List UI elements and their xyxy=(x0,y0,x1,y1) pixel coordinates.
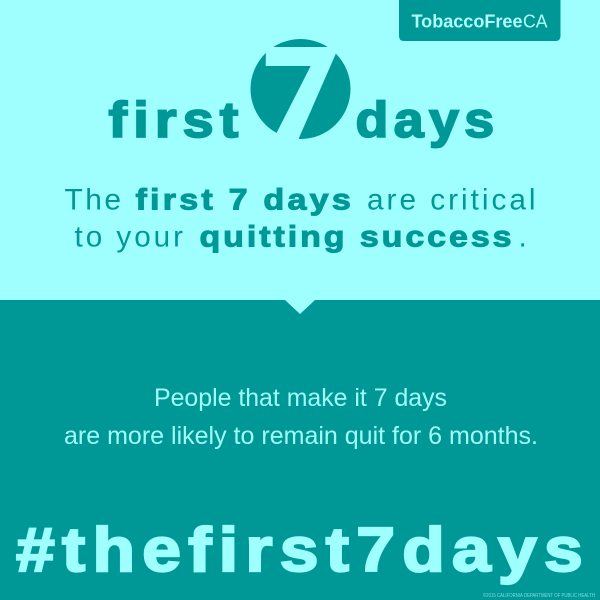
logo: TobaccoFreeCA badge xyxy=(399,0,560,41)
heading word: days: days xyxy=(356,92,500,148)
logo: TobaccoFreeCA badge: TobaccoFree xyxy=(412,10,522,32)
line one: first 7 days: first 7 days xyxy=(136,184,354,216)
icon: circle with 7 xyxy=(250,39,350,145)
text block: critical statement xyxy=(64,184,538,254)
heading word: first: first xyxy=(108,92,244,148)
logo: TobaccoFreeCA badge: CA xyxy=(523,10,548,32)
supporting line one: People that make it 7 days xyxy=(154,384,447,412)
line two: period: . xyxy=(518,220,527,254)
panel: light top background xyxy=(0,0,600,300)
line two: to your: to your xyxy=(74,220,186,254)
line one: The: The xyxy=(64,184,124,216)
supporting line two: are more likely to remain quit for 6 months. xyxy=(64,422,538,450)
panel: dark bottom background with pointer xyxy=(0,300,600,600)
heading: first 7 days xyxy=(108,39,500,148)
text block: supporting message xyxy=(64,384,538,450)
line one: are critical: are critical xyxy=(367,184,538,216)
line two: quitting success: quitting success xyxy=(200,220,514,254)
hashtag: #thefirst7days: #thefirst7days xyxy=(16,516,590,585)
